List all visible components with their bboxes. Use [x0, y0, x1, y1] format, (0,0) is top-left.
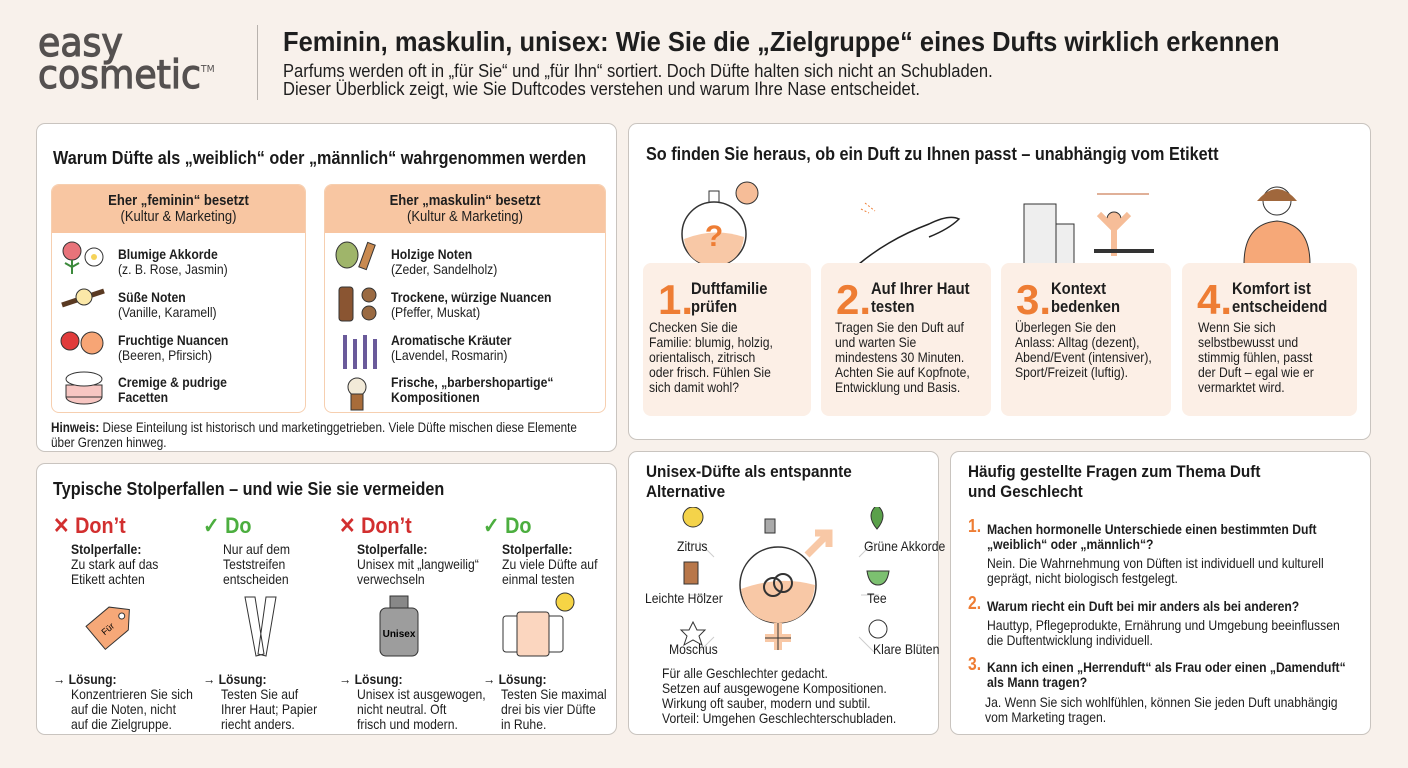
- step 3: Kontext: [1051, 279, 1106, 298]
- panel: Stolperfallen: Testen Sie maximal: [501, 686, 607, 702]
- panel: Stolperfallen: Konzentrieren Sie sich: [71, 686, 193, 702]
- step 3: 3.: [1016, 276, 1051, 323]
- panel: FAQ: Kann ich einen „Herrenduft“ als Frau oder einen „Damenduft“: [987, 659, 1346, 675]
- panel: Stolperfallen: Teststreifen: [223, 556, 285, 572]
- text: [662, 665, 896, 726]
- heading: Unisex-Düfte als entspannte: [646, 462, 852, 481]
- note: [51, 420, 577, 450]
- box: feminin: (z. B. Rose, Jasmin): [118, 261, 228, 277]
- step 4: vermarktet wird.: [1198, 379, 1285, 395]
- panel: FAQ: Ja. Wenn Sie sich wohlfühlen, können Sie jeden Duft unabhängig: [985, 694, 1338, 710]
- panel: Unisex: Tee: [867, 590, 887, 606]
- step 3: [1001, 263, 1171, 416]
- step 4: entscheidend: [1232, 297, 1327, 316]
- step 4: Komfort ist: [1232, 279, 1311, 298]
- box: maskulin: (Lavendel, Rosmarin): [391, 347, 507, 363]
- box: feminin: (Beeren, Pfirsich): [118, 347, 212, 363]
- faq 2: 2.: [968, 593, 981, 613]
- col 2: ✓ Do: [203, 513, 251, 538]
- step 1: Duftfamilie: [691, 279, 767, 298]
- panel: FAQ: „weiblich“ oder „männlich“?: [987, 536, 1153, 552]
- step 3: Abend/Event (intensiver),: [1015, 349, 1152, 365]
- box: feminin: Eher „feminin“ besetzt: [108, 192, 249, 209]
- panel: FAQ: Nein. Die Wahrnehmung von Düften ist individuell und kulturell: [987, 555, 1324, 571]
- panel: Unisex: Zitrus: [677, 538, 707, 554]
- step 2: Tragen Sie den Duft auf: [835, 319, 964, 335]
- logo: [38, 21, 215, 98]
- text: Wirkung oft sauber, modern und subtil.: [662, 695, 871, 711]
- note: über Grenzen hinweg.: [51, 435, 167, 450]
- heading: [968, 462, 1260, 501]
- box: maskulin: Aromatische Kräuter: [391, 332, 511, 348]
- panel: Stolperfallen: auf die Zielgruppe.: [71, 716, 172, 732]
- text: Für alle Geschlechter gedacht.: [662, 665, 828, 681]
- faq 1: 1.: [968, 516, 981, 536]
- step 1: orientalisch, zitrisch: [649, 349, 755, 365]
- panel: steps: [628, 123, 1371, 440]
- panel: Stolperfallen: Etikett achten: [71, 571, 145, 587]
- step 2: mindestens 30 Minuten.: [835, 349, 964, 365]
- text: Setzen auf ausgewogene Kompositionen.: [662, 680, 887, 696]
- logo: easy: [38, 21, 123, 66]
- box: maskulin: (Zeder, Sandelholz): [391, 261, 497, 277]
- step 2: testen: [871, 297, 915, 316]
- step 1: sich damit wohl?: [649, 379, 739, 395]
- panel: FAQ: [950, 451, 1371, 735]
- step 3: Überlegen Sie den: [1015, 319, 1116, 335]
- panel: Stolperfallen: Unisex: [383, 629, 416, 640]
- panel: FAQ: Warum riecht ein Duft bei mir anders als bei anderen?: [987, 598, 1299, 614]
- step 1: oder frisch. Fühlen Sie: [649, 364, 771, 380]
- step 1: 1.: [658, 276, 693, 323]
- subtitle: [283, 61, 993, 99]
- panel: Stolperfallen: Unisex mit „langweilig“: [357, 556, 479, 572]
- box: maskulin: Trockene, würzige Nuancen: [391, 289, 551, 305]
- heading: So finden Sie heraus, ob ein Duft zu Ihnen passt – unabhängig vom Etikett: [646, 144, 1218, 164]
- panel: Unisex: Grüne Akkorde: [864, 538, 945, 554]
- box: feminin: (Kultur & Marketing): [120, 208, 237, 225]
- panel: Stolperfallen: Testen Sie auf: [221, 686, 298, 702]
- panel: Stolperfallen: in Ruhe.: [501, 716, 546, 732]
- text: Vorteil: Umgehen Geschlechterschubladen.: [662, 710, 896, 726]
- panel: Stolperfallen: Stolperfalle:: [502, 541, 572, 557]
- step 2: und warten Sie: [835, 334, 916, 350]
- box: maskulin: Eher „maskulin“ besetzt: [390, 192, 540, 209]
- box: feminin: Blumige Akkorde: [118, 246, 218, 262]
- panel: Stolperfallen: [36, 463, 617, 735]
- step 4: [1182, 263, 1357, 416]
- col 3: ✕ Don’t: [339, 513, 412, 538]
- heading: Häufig gestellte Fragen zum Thema Duft: [968, 462, 1260, 481]
- box: feminin: Facetten: [118, 389, 168, 405]
- faq 3: 3.: [968, 654, 981, 674]
- box: feminin: [51, 184, 306, 413]
- step 4: stimmig fühlen, passt: [1198, 349, 1312, 365]
- panel: Unisex: Leichte Hölzer: [645, 590, 723, 606]
- subtitle: Dieser Überblick zeigt, wie Sie Duftcodes verstehen und warum Ihre Nase entscheidet.: [283, 79, 920, 99]
- icons: [681, 182, 1310, 263]
- panel: Stolperfallen: entscheiden: [223, 571, 289, 587]
- col 4: ✓ Do: [483, 513, 531, 538]
- panel: Stolperfallen: Ihrer Haut; Papier: [221, 701, 317, 717]
- panel: Stolperfallen: Nur auf dem: [223, 541, 290, 557]
- step 1: Checken Sie die: [649, 319, 738, 335]
- subtitle: Parfums werden oft in „für Sie“ und „für Ihn“ sortiert. Doch Düfte halten sich nicht an Schubladen.: [283, 61, 993, 81]
- box: feminin: Fruchtige Nuancen: [118, 332, 228, 348]
- panel: FAQ: die Duftentwicklung individuell.: [987, 632, 1153, 648]
- panel: Stolperfallen: Zu viele Düfte auf: [502, 556, 597, 572]
- panel: Stolperfallen: → Lösung:: [339, 671, 403, 687]
- panel: Stolperfallen: verwechseln: [357, 571, 425, 587]
- step 2: Achten Sie auf Kopfnote,: [835, 364, 970, 380]
- step 2: [821, 263, 991, 416]
- box: feminin: Süße Noten: [118, 289, 186, 305]
- panel: Stolperfallen: Für: [99, 621, 116, 637]
- step 4: selbstbewusst und: [1198, 334, 1298, 350]
- panel: Stolperfallen: auf die Noten, nicht: [71, 701, 176, 717]
- panel: Unisex: [628, 451, 939, 735]
- box: maskulin: Frische, „barbershopartige“: [391, 374, 553, 390]
- step 4: 4.: [1197, 276, 1232, 323]
- heading: Alternative: [646, 482, 725, 501]
- step 4: der Duft – egal wie er: [1198, 364, 1314, 380]
- note: Hinweis: Diese Einteilung ist historisch und marketinggetrieben. Viele Düfte mischen diese Elemente: [51, 420, 577, 435]
- panel: Stolperfallen: drei bis vier Düfte: [501, 701, 596, 717]
- panel: Stolperfallen: riecht anders.: [221, 716, 295, 732]
- step 1: Familie: blumig, holzig,: [649, 334, 773, 350]
- box: maskulin: [324, 184, 606, 413]
- panel: FAQ: als Mann tragen?: [987, 674, 1087, 690]
- box: maskulin: Kompositionen: [391, 389, 480, 405]
- step 3: Sport/Freizeit (luftig).: [1015, 364, 1128, 380]
- panel: Warum Düfte: [36, 123, 617, 452]
- title: Feminin, maskulin, unisex: Wie Sie die „Zielgruppe“ eines Dufts wirklich erkennen: [283, 26, 1280, 57]
- panel: Stolperfallen: Zu stark auf das: [71, 556, 158, 572]
- panel: Unisex: Klare Blüten: [873, 641, 939, 657]
- panel: Stolperfallen: Stolperfalle:: [357, 541, 427, 557]
- step 3: bedenken: [1051, 297, 1120, 316]
- step 1: prüfen: [691, 297, 737, 316]
- heading: Typische Stolperfallen – und wie Sie sie vermeiden: [53, 479, 444, 499]
- step 2: Auf Ihrer Haut: [871, 279, 970, 298]
- panel: Unisex: Moschus: [669, 641, 718, 657]
- step 3: Anlass: Alltag (dezent),: [1015, 334, 1140, 350]
- panel: Stolperfallen: nicht neutral. Oft: [357, 701, 446, 717]
- diagram: [680, 507, 890, 652]
- panel: FAQ: geprägt, nicht biologisch festgelegt.: [987, 570, 1178, 586]
- panel: Stolperfallen: → Lösung:: [203, 671, 267, 687]
- step 2: 2.: [836, 276, 871, 323]
- panel: Stolperfallen: Stolperfalle:: [71, 541, 141, 557]
- step 1: [643, 263, 811, 416]
- panel: Stolperfallen: frisch und modern.: [357, 716, 458, 732]
- box: maskulin: Holzige Noten: [391, 246, 472, 262]
- panel: Stolperfallen: Unisex ist ausgewogen,: [357, 686, 486, 702]
- panel: Stolperfallen: → Lösung:: [483, 671, 547, 687]
- box: feminin: (Vanille, Karamell): [118, 304, 217, 320]
- heading: und Geschlecht: [968, 482, 1083, 501]
- step 2: Entwicklung und Basis.: [835, 379, 960, 395]
- step 4: Wenn Sie sich: [1198, 319, 1276, 335]
- box: maskulin: (Pfeffer, Muskat): [391, 304, 480, 320]
- icons: ?: [705, 220, 723, 253]
- panel: FAQ: Machen hormonelle Unterschiede einen bestimmten Duft: [987, 521, 1317, 537]
- panel: FAQ: Hauttyp, Pflegeprodukte, Ernährung und Umgebung beeinflussen: [987, 617, 1340, 633]
- logo: cosmeticTM: [38, 53, 215, 98]
- heading: Warum Düfte als „weiblich“ oder „männlich“ wahrgenommen werden: [53, 148, 586, 168]
- box: maskulin: (Kultur & Marketing): [407, 208, 523, 225]
- heading: [646, 462, 852, 501]
- panel: FAQ: vom Marketing tragen.: [985, 709, 1106, 725]
- box: feminin: Cremige & pudrige: [118, 374, 227, 390]
- panel: Stolperfallen: einmal testen: [502, 571, 574, 587]
- panel: Stolperfallen: → Lösung:: [53, 671, 117, 687]
- col 1: ✕ Don’t: [53, 513, 126, 538]
